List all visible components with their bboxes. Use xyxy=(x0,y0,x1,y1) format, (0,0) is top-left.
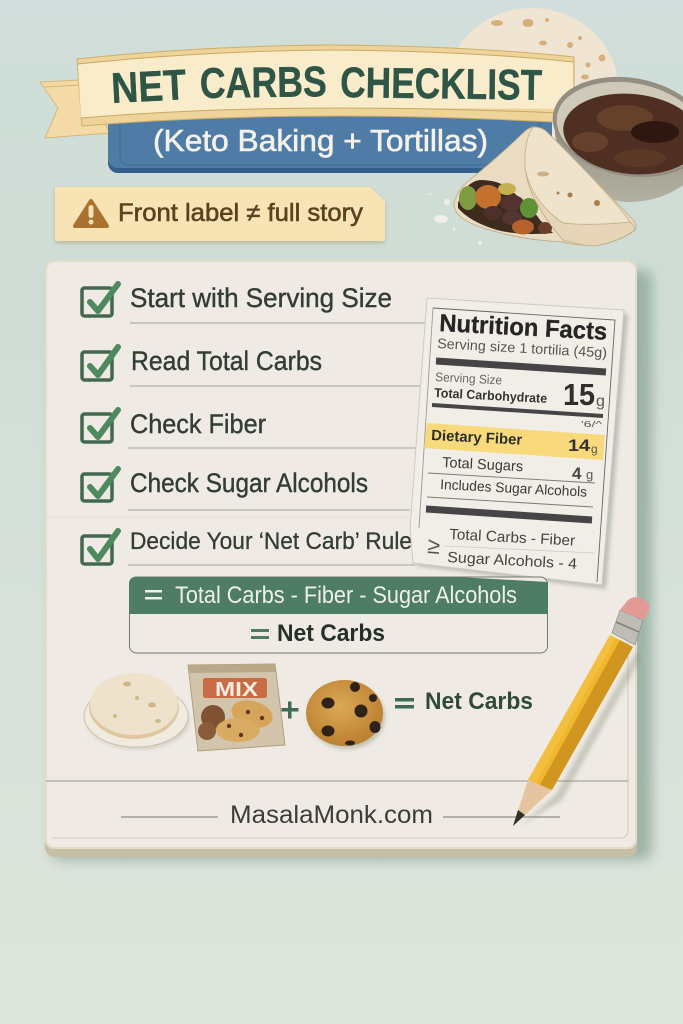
dietary fiber highlight row xyxy=(424,423,605,460)
title text: CHECKLIST xyxy=(340,59,543,110)
sugar alcohols row: Includes Sugar Alcohols xyxy=(440,476,587,500)
formula box xyxy=(129,577,548,653)
dietary fiber highlight row: Dietary Fiber xyxy=(431,427,523,449)
title text: NET xyxy=(110,61,187,113)
icon: mix bag xyxy=(188,664,285,751)
icon: mix bag: MIX xyxy=(215,679,259,701)
panel: checklist card xyxy=(45,260,652,860)
dietary fiber highlight row: g xyxy=(591,442,598,456)
bowl of sauce xyxy=(545,65,683,202)
burrito wrap xyxy=(429,127,636,246)
checklist row 5: Decide Your ‘Net Carb’ Rule xyxy=(130,528,412,555)
title text: CARBS xyxy=(199,58,327,108)
nutrition facts label xyxy=(410,298,628,589)
icon: tortilla on plate xyxy=(84,673,189,749)
nutrition heading: Nutrition Facts xyxy=(439,310,608,346)
greater-than symbol: ≥ xyxy=(427,532,441,559)
subtitle ribbon xyxy=(108,110,552,173)
banner ribbon tail xyxy=(40,80,110,138)
checklist row 4: Check Sugar Alcohols xyxy=(130,468,368,498)
total sugars row: g xyxy=(586,467,593,482)
total sugars row xyxy=(442,455,593,483)
total carbohydrate row: g xyxy=(596,393,605,410)
checklist row 2 xyxy=(82,346,420,386)
formula lines xyxy=(445,526,595,573)
serving size line: Serving size 1 tortilia (45g) xyxy=(437,335,607,360)
plus sign xyxy=(282,702,298,718)
total sugars row: Total Sugars xyxy=(442,455,524,475)
equals net carbs: Net Carbs xyxy=(425,688,533,715)
footer website: MasalaMonk.com xyxy=(230,801,433,829)
title banner xyxy=(77,45,574,126)
checklist row 3 xyxy=(82,409,416,448)
checklist row 1: Start with Serving Size xyxy=(130,283,392,313)
icon: warning triangle xyxy=(75,201,107,226)
total carbohydrate row xyxy=(434,377,605,412)
checklist row 2: Read Total Carbs xyxy=(131,346,322,376)
warning text: Front label ≠ full story xyxy=(118,199,364,227)
total sugars row: 4 xyxy=(572,464,582,483)
checklist row 1 xyxy=(82,283,425,323)
icon: chocolate chip cookie xyxy=(306,680,385,749)
checklist row 5 xyxy=(82,528,415,565)
formula lines: Total Carbs - Fiber xyxy=(449,526,576,550)
formula text: Total Carbs - Fiber - Sugar Alcohols xyxy=(175,582,517,609)
top tortilla xyxy=(446,8,618,168)
total carbohydrate row: Total Carbohydrate xyxy=(434,385,547,406)
crumbs xyxy=(429,193,482,245)
total carbohydrate row: 15 xyxy=(563,377,595,412)
subtitle text: (Keto Baking + Tortillas) xyxy=(153,123,488,158)
icon: pencil xyxy=(513,597,649,826)
checklist row 3: Check Fiber xyxy=(130,409,266,439)
warning label xyxy=(55,187,385,243)
burrito filling xyxy=(458,180,553,234)
small note: '6/^ xyxy=(581,420,602,429)
checklist row 4 xyxy=(82,468,410,510)
serving size label: Serving Size xyxy=(435,370,503,388)
formula lines: Sugar Alcohols - 4 xyxy=(447,549,578,573)
dietary fiber highlight row: 14 xyxy=(568,436,591,455)
net carbs result: Net Carbs xyxy=(277,620,385,647)
title text xyxy=(110,58,543,113)
